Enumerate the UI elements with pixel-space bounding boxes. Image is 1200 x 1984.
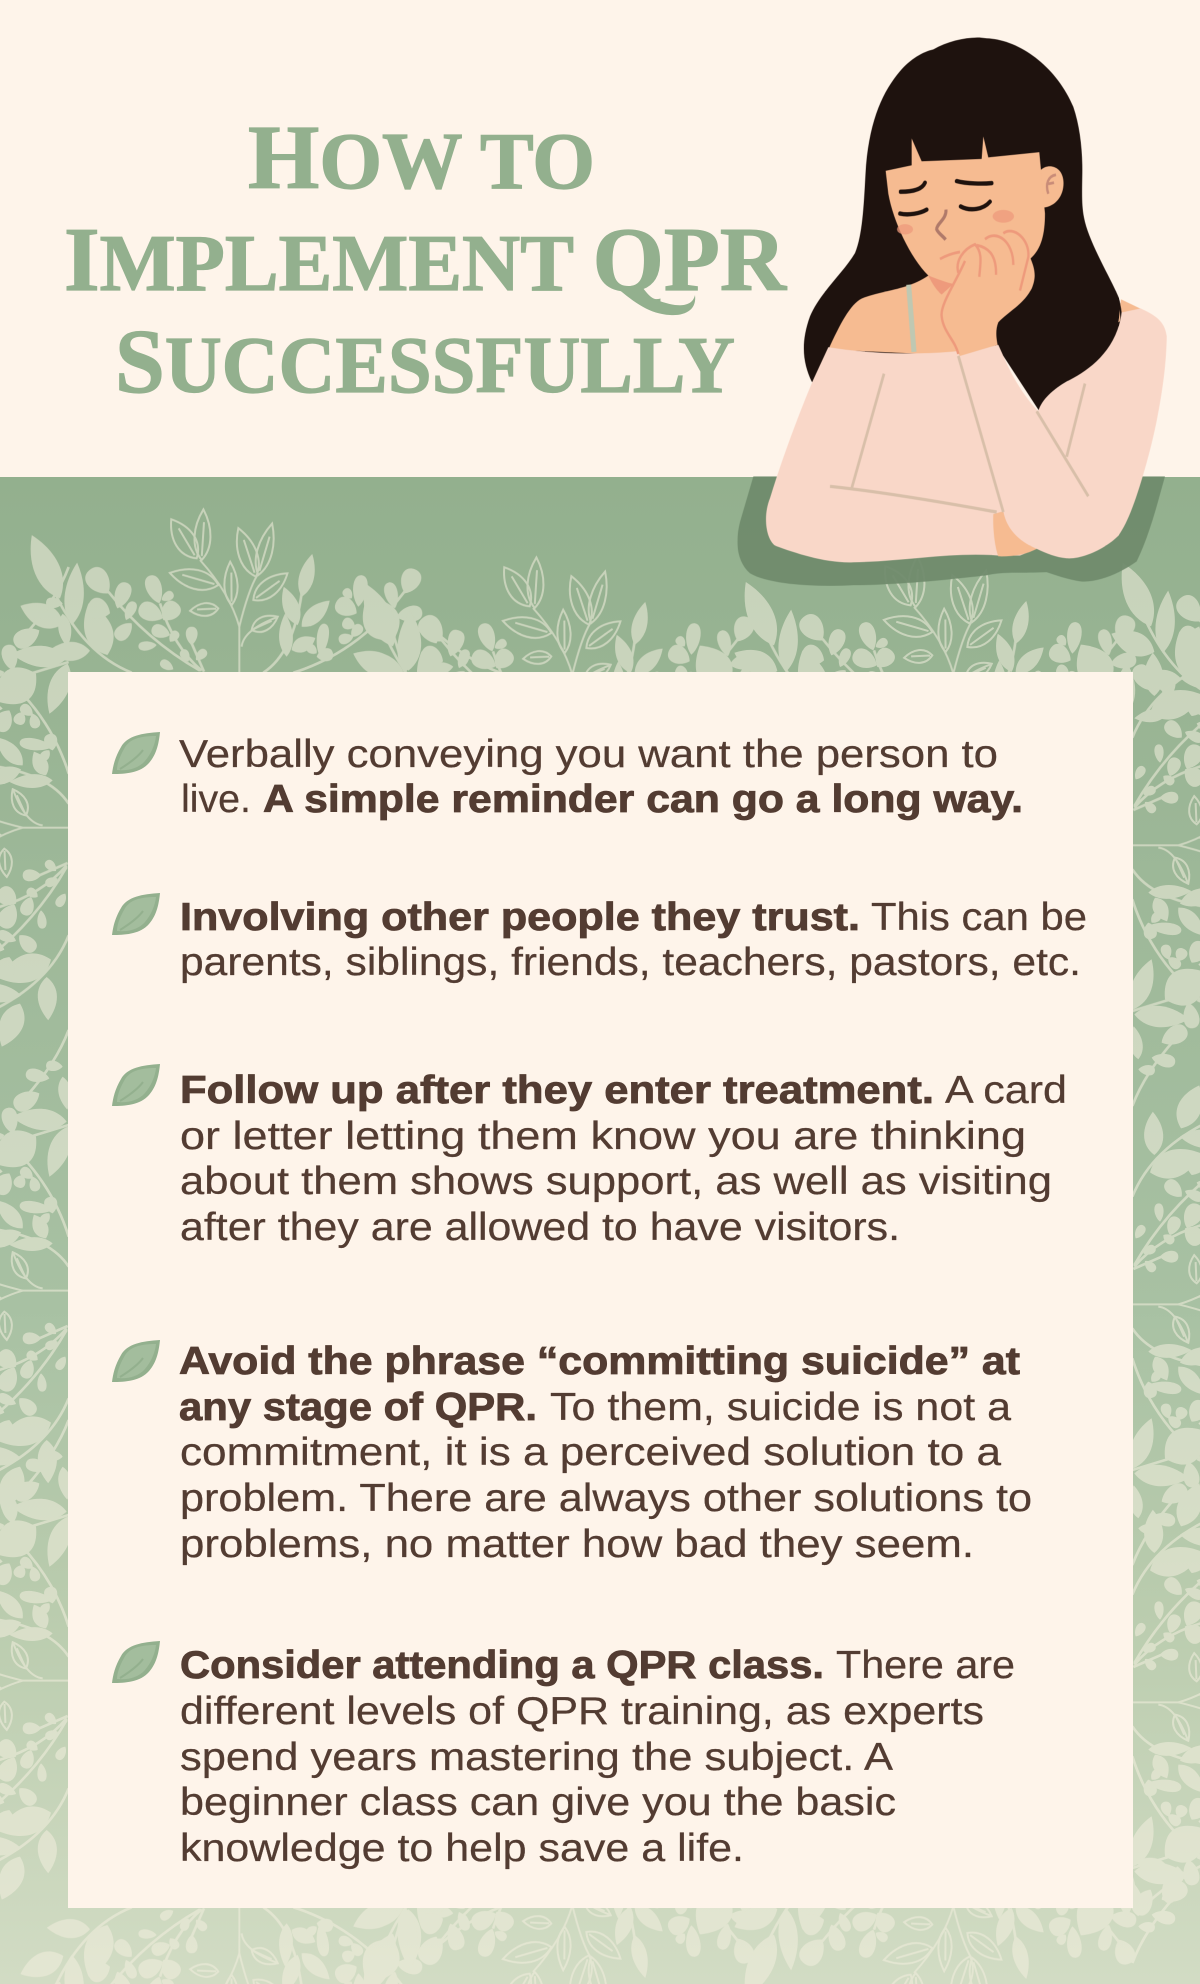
bra strap — [909, 285, 914, 352]
text block 5: different levels of QPR training, as experts — [180, 1690, 984, 1733]
title line 2: IMPLEMENT QPR — [64, 209, 787, 310]
background: green gradient band — [0, 477, 1200, 1984]
text block 3: about them shows support, as well as visiting — [180, 1160, 1052, 1203]
text block 4: any stage of QPR. — [179, 1386, 537, 1429]
text block 3: or letter letting them know you are thinking — [180, 1115, 1026, 1158]
background: cream header — [0, 0, 1200, 477]
text block 1: Verbally conveying you want the person to — [179, 733, 998, 776]
visible hand under elbow — [993, 511, 1037, 556]
hair strand — [1068, 301, 1121, 382]
hair — [804, 37, 1121, 411]
ear detail — [1047, 175, 1056, 194]
icon: leaf bullet 4 — [112, 1340, 160, 1382]
text block 3: after they are allowed to have visitors. — [180, 1206, 900, 1249]
text block 4: To them, suicide is not a — [550, 1386, 1012, 1429]
face — [886, 136, 1045, 287]
text block 5 — [180, 1644, 1015, 1870]
icon: leaf bullet 3 — [112, 1064, 160, 1106]
text block 3 — [180, 1069, 1067, 1249]
text block 5: There are — [836, 1644, 1015, 1687]
text block 1: A simple reminder can go a long way. — [263, 778, 1023, 821]
title line 3: SUCCESSFULLY — [115, 311, 735, 412]
far shoulder — [1118, 299, 1142, 322]
title Q swash — [617, 288, 695, 315]
eyes and brows — [900, 181, 992, 214]
text block 4: Avoid the phrase “committing suicide” at — [179, 1340, 1020, 1383]
text block 3: Follow up after they enter treatment. — [180, 1069, 934, 1112]
bullet item 2 — [112, 893, 1087, 984]
neck shadow — [928, 276, 953, 295]
text block 1 — [179, 733, 1023, 821]
text block 5: beginner class can give you the basic — [180, 1781, 896, 1824]
text block 3: A card — [945, 1069, 1067, 1112]
text block 5: spend years mastering the subject. A — [180, 1736, 893, 1779]
sweater shadow — [737, 476, 1165, 586]
text block 2: parents, siblings, friends, teachers, pastors, etc. — [180, 941, 1081, 984]
text block 4: problems, no matter how bad they seem. — [180, 1523, 974, 1566]
bullet item 3 — [112, 1064, 1067, 1249]
illustration: sad woman resting chin on hand — [737, 37, 1167, 586]
blush cheeks — [897, 210, 1014, 234]
sweater fold lines — [830, 356, 1088, 512]
text block 4: problem. There are always other solutions to — [180, 1477, 1032, 1520]
title — [64, 107, 787, 412]
ear — [1041, 166, 1064, 208]
shoulders — [828, 276, 963, 356]
panel: text card — [68, 672, 1133, 1908]
foliage pattern — [0, 509, 1200, 1984]
hand — [942, 230, 1035, 356]
sweater — [766, 308, 1167, 562]
text block 4: commitment, it is a perceived solution to a — [180, 1431, 1002, 1474]
text block 1: live. — [181, 778, 251, 821]
text block 5: knowledge to help save a life. — [180, 1827, 744, 1870]
hand contour lines — [940, 231, 1028, 354]
text block 2: Involving other people they trust. — [180, 896, 860, 939]
text block 2: This can be — [871, 896, 1087, 939]
title line 1: HOW TO — [248, 107, 595, 208]
bullet item 5 — [112, 1641, 1015, 1870]
icon: leaf bullet 1 — [112, 732, 160, 774]
icon: leaf bullet 2 — [112, 893, 160, 935]
text block 2 — [180, 896, 1087, 984]
text block 5: Consider attending a QPR class. — [180, 1644, 824, 1687]
bullet item 1 — [112, 732, 1023, 821]
text block 4 — [179, 1340, 1032, 1566]
bullet item 4 — [112, 1340, 1032, 1566]
icon: leaf bullet 5 — [112, 1641, 160, 1683]
nose — [937, 210, 946, 240]
